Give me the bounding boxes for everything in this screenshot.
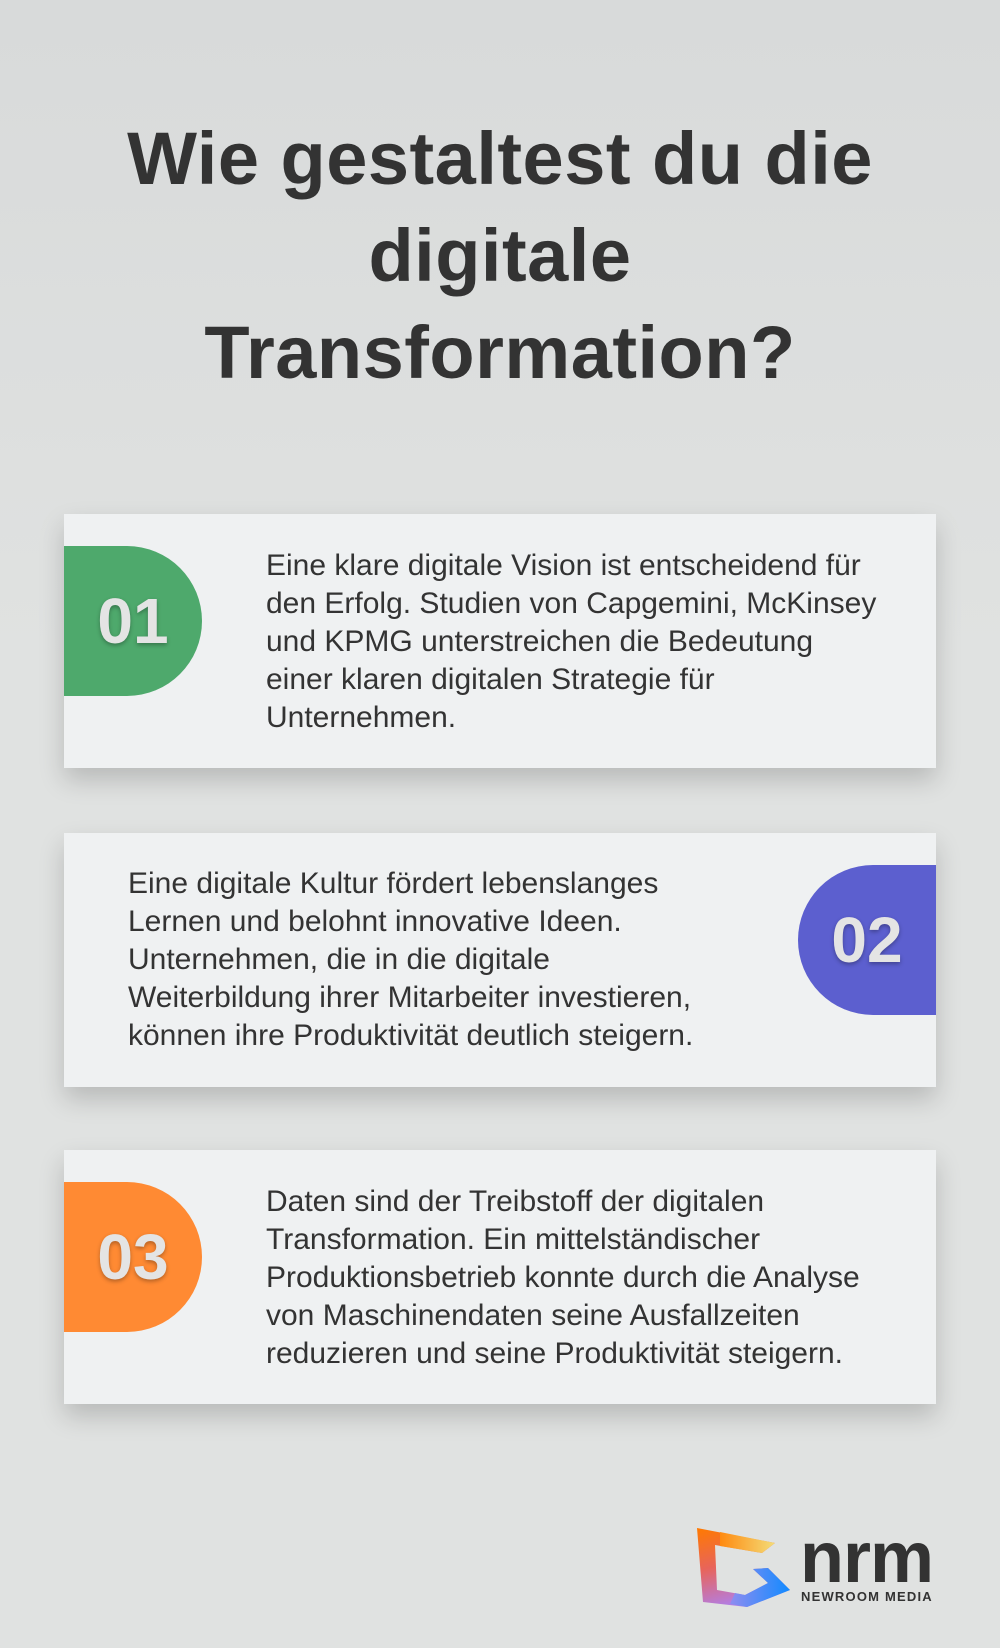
badge 03 [64, 1182, 202, 1332]
title: Wie gestaltest du die [127, 117, 873, 200]
text 2 [128, 867, 693, 1052]
text 3: Daten sind der Treibstoff der digitalen [266, 1185, 764, 1218]
text 1: den Erfolg. Studien von Capgemini, McKinsey [266, 587, 876, 620]
text 2: Unternehmen, die in die digitale [128, 943, 550, 976]
text 3: von Maschinendaten seine Ausfallzeiten [266, 1299, 800, 1332]
panel: card 1 [64, 514, 936, 768]
title: Transformation? [204, 311, 796, 394]
panel: card 2 [64, 833, 936, 1087]
text 3: Produktionsbetrieb konnte durch die Analyse [266, 1261, 860, 1294]
panel: card 3 [64, 1150, 936, 1404]
badge 02 [798, 865, 936, 1015]
text 1: einer klaren digitalen Strategie für [266, 663, 715, 696]
text 1: Unternehmen. [266, 701, 456, 734]
icon: nrm mark [697, 1528, 790, 1607]
title: digitale [368, 214, 632, 297]
badge 02: 02 [831, 904, 903, 976]
title [127, 117, 873, 394]
text 3: Transformation. Ein mittelständischer [266, 1223, 760, 1256]
text 2: Eine digitale Kultur fördert lebenslanges [128, 867, 658, 900]
text 1: und KPMG unterstreichen die Bedeutung [266, 625, 813, 658]
text 3 [266, 1185, 860, 1370]
text 1: Eine klare digitale Vision ist entscheidend für [266, 549, 861, 582]
badge 01 [64, 546, 202, 696]
text 2: Weiterbildung ihrer Mitarbeiter investieren, [128, 981, 691, 1014]
text 1 [266, 549, 876, 734]
badge 03: 03 [97, 1221, 169, 1293]
subtitle: NEWROOM MEDIA [801, 1589, 933, 1604]
nrm wordmark: nrm [800, 1518, 933, 1598]
text 3: reduzieren und seine Produktivität steigern. [266, 1337, 843, 1370]
logo [697, 1518, 933, 1607]
text 2: Lernen und belohnt innovative Ideen. [128, 905, 622, 938]
badge 01: 01 [97, 585, 169, 657]
text 2: können ihre Produktivität deutlich steigern. [128, 1019, 693, 1052]
